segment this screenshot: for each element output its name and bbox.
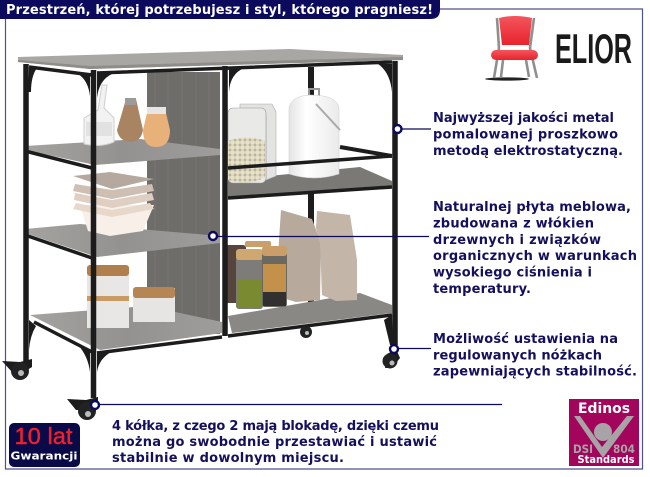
item: food jars [224,241,287,309]
item: stacked bowls [73,172,154,236]
frame corner brackets [28,64,393,372]
badge: Edinos standards: DSI [573,442,593,456]
item: brown jar [117,98,143,142]
item: white milk can [289,89,340,178]
callout: wheels: stabilnie w dowolnym miejscu. [112,451,344,466]
callout: metal: Najwyższej jakości metal [433,111,614,126]
icon: red chair [485,16,538,81]
callout: feet [390,332,637,380]
wheel: back left [2,359,32,380]
callout: board: zbudowana z włókien [433,216,594,232]
back wood panel [147,72,220,334]
badge: Edinos standards: Standards [578,453,635,466]
callout: feet: zapewniających stabilność. [433,364,637,380]
badge: Edinos standards [569,399,639,466]
item: storage containers [87,265,175,328]
badge: Edinos standards: 804 [613,442,635,456]
callout: board: drzewnych i związków [433,233,601,248]
item: paper bags [276,210,357,302]
callout: board: organicznych w warunkach [433,249,637,264]
banner: Przestrzeń, której potrzebujesz i styl, którego pragniesz! [6,3,433,18]
item: glass jars with pearls [228,104,276,183]
callout: wheels: 4 kółka, z czego 2 mają blokadę, dzięki czemu [112,419,439,434]
callout: metal: pomalowanej proszkowo [433,128,618,142]
callout: wheels: można go swobodnie przestawiać i ustawić [112,435,437,450]
badge: Edinos standards: Edinos [578,401,630,417]
callout: board [209,200,637,297]
callout: board: Naturalnej płyta meblowa, [433,200,631,215]
logo: Elior [485,16,632,81]
back right leg [308,67,314,317]
metal frame [25,61,395,398]
product: shelving unit [2,49,403,420]
badge: 10 years warranty: Gwarancji [10,450,78,462]
item: orange jar [143,107,170,147]
item: glass bottle [84,85,114,146]
shelves [25,139,392,350]
callout: feet: regulowanych nóżkach [433,348,602,364]
table top [18,49,403,69]
callout: board: temperatury. [433,282,531,297]
callout: metal [394,111,623,159]
callout: wheels [91,401,502,466]
badge: 10 years warranty: 10 lat [14,423,73,449]
callout: board: wysokiego ciśnienia i [433,266,592,280]
badge: 10 years warranty [9,423,80,467]
back rail [228,147,392,156]
wheel: back middle [300,326,312,338]
wheel: front right [382,349,400,368]
callout: feet: Możliwość ustawienia na [433,332,618,347]
wheel: front left [67,397,98,420]
callout: metal: metodą elektrostatyczną. [433,144,623,159]
